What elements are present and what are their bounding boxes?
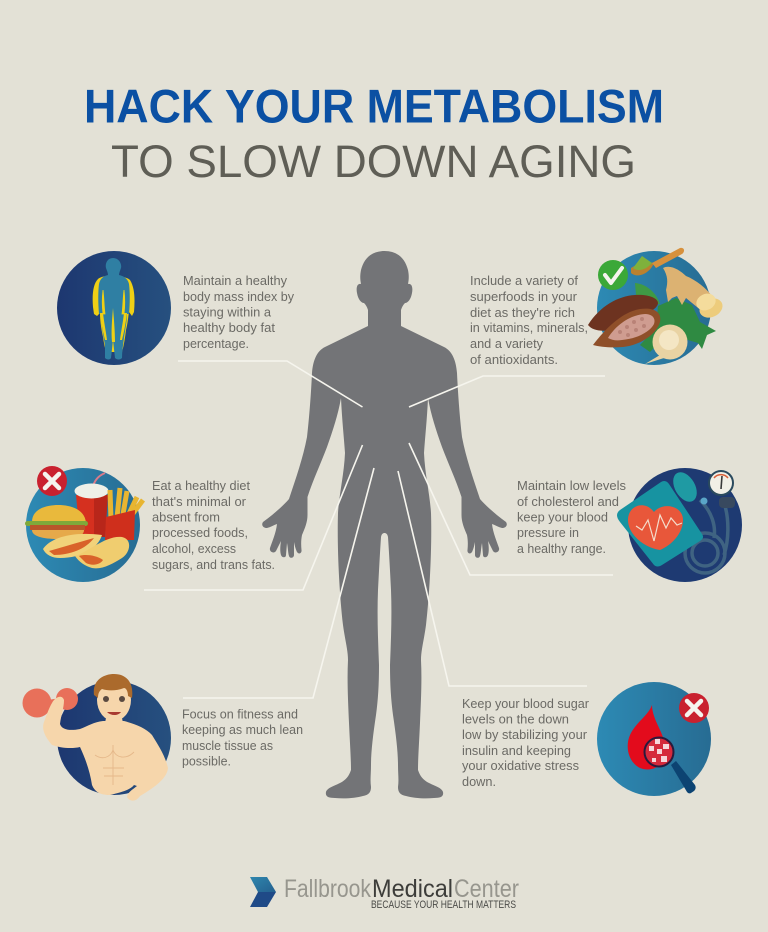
icon: blood pressure monitor: [617, 468, 742, 582]
text: superfoods: diet as they're rich: [470, 305, 575, 320]
text: blood sugar: down.: [462, 774, 496, 789]
text: fitness: possible.: [182, 754, 231, 768]
panel: cholesterol and blood pressure: [517, 468, 742, 582]
logo: Fallbrook Medical Center: BECAUSE YOUR HEALTH MATTERS: [371, 899, 516, 911]
text: fitness: muscle tissue as: [182, 738, 273, 753]
text: cholesterol and blood pressure: keep your blood: [517, 510, 608, 524]
panel: fitness: [22, 674, 303, 801]
icon: body fat figure: [57, 251, 171, 365]
human body silhouette: [262, 251, 507, 798]
text: body mass index: percentage.: [183, 336, 249, 351]
icon: superfoods: [588, 248, 726, 365]
text: fitness: Focus on fitness and: [182, 706, 298, 722]
text: cholesterol and blood pressure: a healthy range.: [517, 541, 606, 556]
title: HACK YOUR METABOLISM: [84, 80, 664, 132]
text: body mass index: [183, 273, 294, 351]
text: blood sugar: levels on the down: [462, 712, 569, 726]
logo: Fallbrook Medical Center: Medical: [372, 875, 453, 903]
text: blood sugar: Keep your blood sugar: [462, 696, 590, 711]
text: cholesterol and blood pressure: Maintain low levels: [517, 478, 626, 493]
text: fitness: keeping as much lean: [182, 722, 303, 737]
text: superfoods: of antioxidants.: [470, 352, 558, 367]
text: healthy diet: processed foods,: [152, 525, 248, 540]
title: TO SLOW DOWN AGING: [111, 136, 636, 187]
panel: body mass index: [57, 251, 294, 365]
text: superfoods: [470, 273, 588, 367]
text: cholesterol and blood pressure: pressure in: [517, 525, 579, 540]
title: [84, 80, 664, 187]
text: body mass index: Maintain a healthy: [183, 273, 287, 288]
text: body mass index: staying within a: [183, 304, 272, 320]
icon: fast food: [25, 466, 143, 582]
panel: superfoods: [470, 248, 726, 367]
connector lines: [144, 361, 613, 698]
text: body mass index: healthy body fat: [183, 320, 275, 335]
text: healthy diet: absent from: [152, 510, 220, 524]
text: healthy diet: Eat a healthy diet: [152, 478, 250, 493]
text: blood sugar: insulin and keeping: [462, 743, 571, 758]
text: healthy diet: alcohol, excess: [152, 541, 236, 556]
text: healthy diet: that's minimal or: [152, 494, 247, 509]
panel: blood sugar: [462, 682, 711, 796]
logo: Fallbrook Medical Center: Center: [454, 875, 519, 903]
logo: Fallbrook Medical Center: Fallbrook: [284, 875, 371, 903]
text: cholesterol and blood pressure: [517, 478, 626, 556]
panel: healthy diet: [25, 466, 275, 582]
text: healthy diet: [152, 478, 275, 572]
text: body mass index: body mass index by: [183, 289, 294, 304]
text: cholesterol and blood pressure: of cholesterol and: [517, 494, 619, 509]
text: superfoods: Include a variety of: [470, 273, 578, 288]
text: superfoods: superfoods in your: [470, 289, 578, 304]
text: healthy diet: sugars, and trans fats.: [152, 557, 275, 572]
icon: muscular man with dumbbell: [22, 674, 171, 801]
icon: blood drop under magnifier: [597, 682, 711, 796]
text: fitness: [182, 706, 303, 768]
text: superfoods: and a variety: [470, 336, 543, 351]
text: blood sugar: your oxidative stress: [462, 758, 579, 773]
text: blood sugar: low by stabilizing your: [462, 727, 588, 742]
text: blood sugar: [462, 696, 590, 789]
logo: Fallbrook Medical Center: [250, 875, 519, 911]
icon: logo chevron: [250, 877, 276, 907]
text: superfoods: in vitamins, minerals,: [470, 320, 588, 335]
